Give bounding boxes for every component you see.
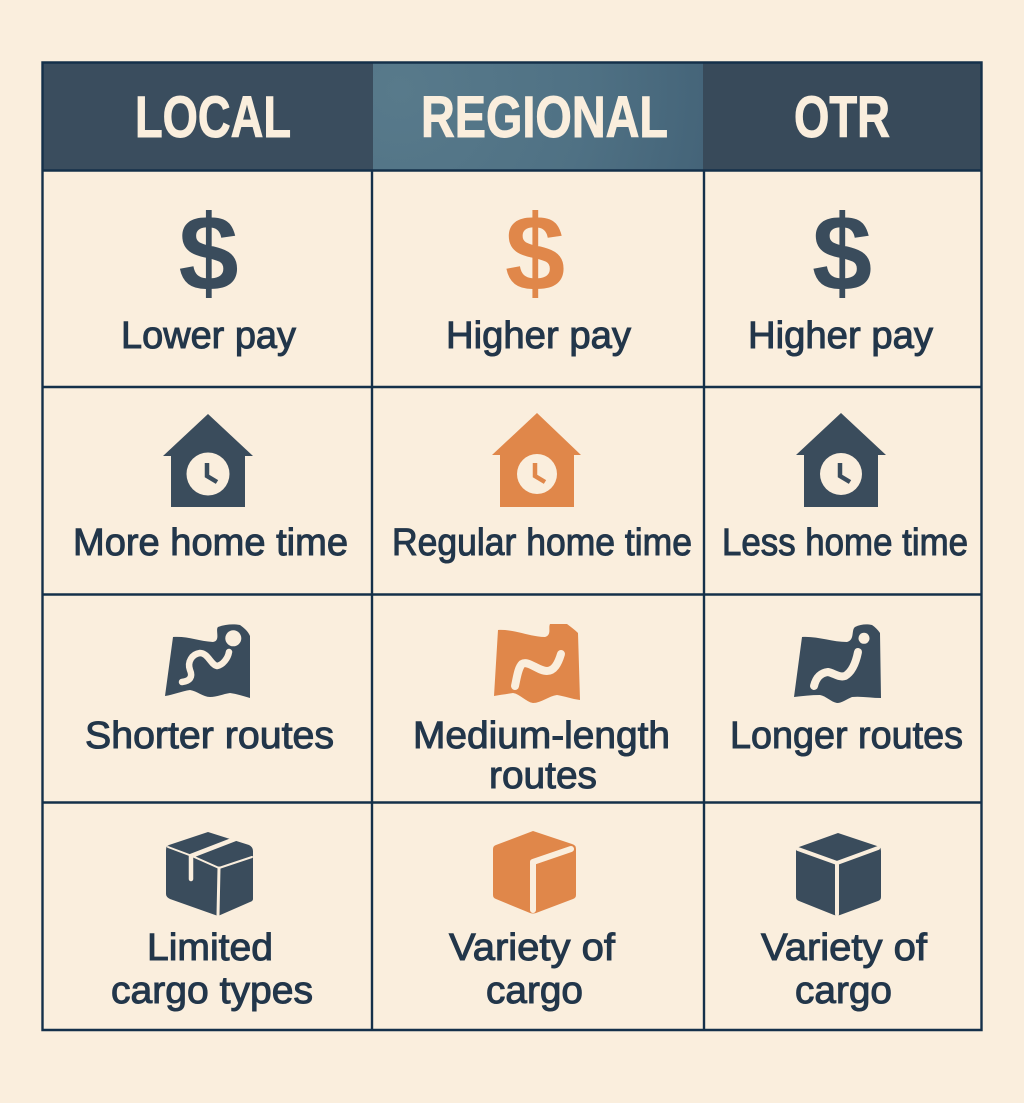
column header: Regional	[373, 62, 703, 170]
label: Limited cargo types: cargo types	[111, 970, 313, 1012]
column header: Regional: REGIONAL	[421, 85, 668, 150]
icon: map with short route	[165, 624, 250, 698]
cell: OTR cargo	[761, 833, 927, 1012]
icon: house with clock	[492, 413, 581, 507]
label: Longer routes: Longer routes	[730, 715, 963, 757]
label: Medium-length routes: Medium-length	[413, 715, 670, 757]
cell: Regional routes	[413, 624, 670, 797]
icon: dollar sign: $	[178, 192, 239, 313]
icon: orange box	[493, 831, 576, 914]
label: More home time: More home time	[73, 522, 348, 564]
cell: Local home time	[73, 414, 348, 564]
icon: map with long route	[794, 624, 881, 703]
icon: map with medium route	[494, 624, 580, 703]
icon: house with clock	[796, 413, 886, 507]
icon: dollar sign: $	[812, 192, 872, 313]
label: Less home time: Less home time	[722, 522, 968, 564]
cell: Local pay	[121, 192, 296, 357]
cell: OTR home time	[722, 413, 968, 564]
label: Medium-length routes: routes	[489, 755, 597, 797]
cell: Regional home time	[392, 413, 692, 564]
icon: dollar sign: $	[505, 192, 565, 313]
cell: Regional pay	[446, 192, 631, 357]
icon: taped box	[166, 832, 253, 916]
cell: Regional cargo	[449, 831, 615, 1012]
cell: Local routes	[85, 624, 334, 757]
label: Variety of cargo: Variety of	[449, 927, 615, 969]
icon: cube box	[796, 833, 881, 916]
label: Higher pay: Higher pay	[748, 315, 933, 357]
label: Higher pay: Higher pay	[446, 315, 631, 357]
label: Variety of cargo: cargo	[795, 970, 892, 1012]
cell: OTR pay	[748, 192, 933, 357]
column header: Local: LOCAL	[135, 85, 291, 150]
icon: house with clock	[163, 414, 253, 507]
column header: OTR: OTR	[794, 85, 890, 150]
label: Variety of cargo: Variety of	[761, 927, 927, 969]
cell: OTR routes	[730, 624, 963, 757]
label: Medium-length routes	[413, 715, 670, 797]
column header: Local	[42, 62, 373, 170]
column header: OTR	[703, 62, 982, 170]
cell: Local cargo	[111, 832, 313, 1012]
label: Limited cargo types: Limited	[147, 927, 273, 969]
label: Regular home time: Regular home time	[392, 522, 692, 564]
label: Shorter routes: Shorter routes	[85, 715, 334, 757]
label: Limited cargo types	[111, 927, 313, 1012]
label: Variety of cargo	[449, 927, 615, 1012]
label: Variety of cargo	[761, 927, 927, 1012]
label: Variety of cargo: cargo	[486, 970, 583, 1012]
label: Lower pay: Lower pay	[121, 315, 296, 357]
